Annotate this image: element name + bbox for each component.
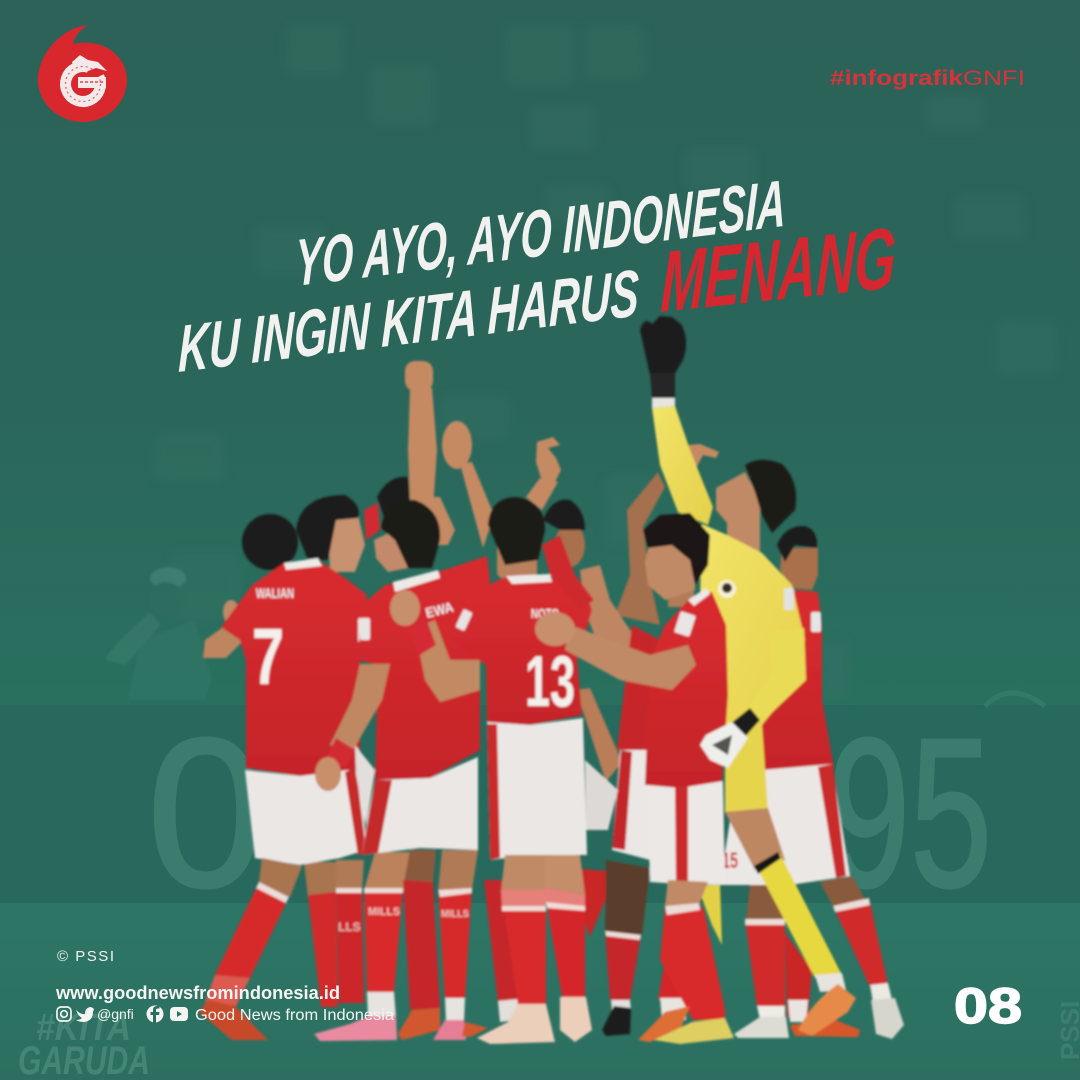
shorts [725, 725, 768, 818]
hashtag: #infografikGNFI: #infografik GNFI [830, 67, 1025, 90]
logo red mark [38, 25, 127, 122]
front right player [535, 513, 734, 1044]
jersey number: 7 [252, 612, 284, 701]
middle back player shorts and shirt [571, 625, 660, 1036]
icon: youtube [170, 1007, 188, 1021]
title line 1: YO AYO, AYO INDONESIA [295, 167, 786, 301]
boots [314, 1016, 397, 1041]
icon: facebook [146, 1006, 164, 1023]
boot [798, 984, 856, 1036]
ghost scoreboard numbers: 0 [147, 694, 265, 931]
boots [734, 1017, 789, 1038]
social row [57, 1006, 394, 1024]
player number 13 [390, 497, 594, 1044]
head [780, 548, 818, 590]
title line 2: KU INGIN KITA HARUS [178, 256, 640, 387]
back player head [543, 500, 585, 567]
neck [668, 575, 694, 607]
shorts [245, 770, 366, 865]
goalkeeper [640, 316, 856, 1036]
cheering player head [364, 477, 455, 545]
shorts [647, 781, 725, 885]
right back player: 15 [722, 848, 738, 873]
title highlight: MENANG: MENANG [659, 210, 897, 331]
shirt [752, 590, 834, 772]
head [328, 515, 365, 572]
ghost scoreboard numbers [147, 694, 992, 931]
far left player head [242, 514, 298, 570]
center-left player [314, 500, 518, 1041]
hair [643, 513, 710, 585]
boot [199, 1000, 268, 1040]
jersey name: NOTO [531, 606, 559, 621]
right back player [720, 526, 904, 1039]
rear arm to hip [576, 688, 622, 782]
face [645, 540, 695, 600]
ghost hashtag: #KITA GARUDA [18, 1007, 150, 1080]
red sleeve on shoulder [542, 535, 594, 610]
jersey name: WALIAN [256, 585, 294, 601]
facebook page name: Good News from Indonesia [195, 1007, 394, 1024]
jersey name: EWA [424, 599, 455, 621]
ghost arc right [985, 693, 1045, 706]
head [497, 540, 537, 578]
player number 7: LLS [338, 920, 361, 934]
shirt [645, 592, 728, 788]
ghost scoreboard numbers: 95 [828, 694, 992, 931]
shorts [362, 757, 478, 855]
center-left player: MILLS [441, 909, 469, 920]
arm and hand [565, 625, 696, 690]
icon: instagram [57, 1007, 71, 1021]
player number 7 [199, 495, 369, 1040]
badge [784, 588, 794, 610]
back arm [203, 618, 244, 658]
logo: GNFI [38, 25, 127, 122]
shorts [487, 718, 587, 860]
logo white garuda G [60, 55, 107, 107]
raised arm sleeve [652, 406, 713, 525]
jersey [700, 524, 805, 750]
website url: www.goodnewsfromindonesia.id [55, 983, 340, 1003]
front leg [259, 858, 302, 897]
shirt [221, 560, 367, 776]
neck and face [716, 472, 760, 553]
shorts [720, 764, 850, 885]
hair [745, 460, 796, 533]
glove [640, 316, 686, 408]
legs [665, 880, 708, 907]
boots [477, 1004, 555, 1044]
jersey number: 13 [525, 642, 575, 722]
shirt [450, 575, 592, 725]
hand on teammate [415, 620, 480, 702]
icon: twitter [76, 1007, 94, 1022]
legs [725, 808, 785, 870]
rear arm raised to shoulder [580, 565, 640, 658]
social handle: @gnfi [97, 1006, 134, 1022]
boots [638, 1006, 690, 1042]
credit: PSSI: © PSSI [57, 948, 114, 965]
shirt [358, 556, 490, 780]
head [374, 530, 408, 572]
center-left player: MILLS [368, 906, 400, 918]
ghost photographer [105, 567, 212, 700]
title: song lyric [178, 167, 897, 387]
back leg [304, 862, 338, 898]
page number: 08: 08 [954, 978, 1022, 1034]
ghost hashtag: #KITA GARUDA: #KITA [36, 1007, 131, 1049]
socks [501, 890, 546, 1005]
upper legs [501, 855, 546, 892]
sleeve [748, 628, 806, 722]
background raised arms [405, 361, 719, 625]
team photo: players huddle [199, 316, 904, 1044]
legs [364, 852, 412, 890]
legs [820, 876, 868, 908]
arm [330, 664, 390, 752]
goalkeeper wrist and white glove [700, 708, 760, 768]
